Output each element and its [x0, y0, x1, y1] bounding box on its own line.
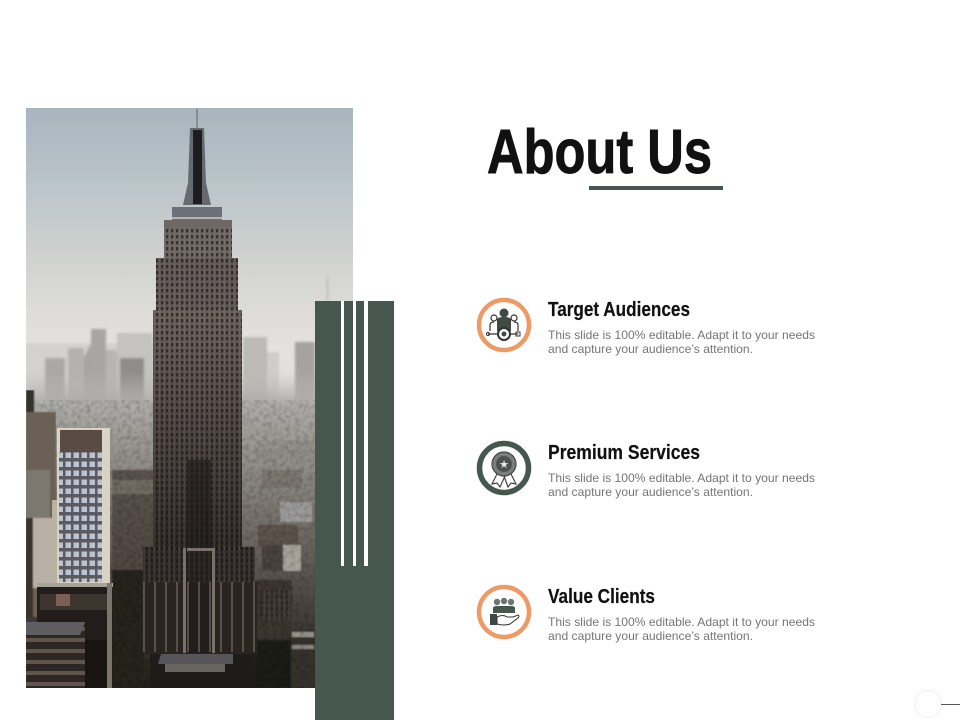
- body text: This slide is 100% editable. Adapt it to your needs: [548, 471, 815, 485]
- title: About Us: [487, 118, 712, 187]
- lower setbacks: [143, 547, 255, 583]
- heading: Premium Services: [548, 442, 700, 464]
- central tower: [142, 109, 257, 654]
- icon: award ribbon: ★: [499, 458, 509, 471]
- shaft: [156, 258, 238, 310]
- body text: This slide is 100% editable. Adapt it to your needs: [548, 615, 815, 629]
- central dark bay: [187, 460, 211, 548]
- item: Target Audiences: and capture your audience’s attention.: [548, 342, 753, 356]
- icon: target audience: [479, 300, 529, 350]
- midground city haze: [26, 378, 315, 688]
- photo: skyscraper and city skyline: [26, 108, 353, 688]
- green panel with white stripes: [315, 301, 394, 720]
- upper setback: [164, 220, 232, 258]
- heading: Value Clients: [548, 586, 655, 608]
- midground buildings: [110, 440, 315, 688]
- item: Value Clients: [479, 586, 815, 643]
- icon: people on open hand: [479, 587, 529, 637]
- spire: [183, 128, 211, 205]
- left side buildings: [26, 390, 56, 618]
- body text: This slide is 100% editable. Adapt it to your needs: [548, 328, 815, 342]
- sky: [26, 108, 353, 428]
- item: Premium Services: [480, 442, 815, 499]
- item: Value Clients: and capture your audience’s attention.: [548, 629, 753, 643]
- limestone ribs: [142, 582, 257, 652]
- white glass tower: [52, 428, 110, 584]
- dark foreground building: [26, 583, 113, 688]
- icon: award ribbon: [480, 444, 528, 492]
- antenna: [196, 109, 198, 129]
- white stripes: [341, 301, 368, 566]
- rooftop in foreground: [150, 654, 255, 678]
- item: Premium Services: and capture your audience’s attention.: [548, 485, 753, 499]
- item: Target Audiences: [479, 299, 815, 356]
- page marker: faint circle and line: [914, 690, 960, 718]
- observation deck: [172, 207, 222, 221]
- window grids: [164, 228, 232, 258]
- heading: Target Audiences: [548, 299, 690, 321]
- distant skyline: [26, 278, 329, 400]
- title underline: [589, 186, 723, 190]
- grain texture on city: [32, 400, 315, 666]
